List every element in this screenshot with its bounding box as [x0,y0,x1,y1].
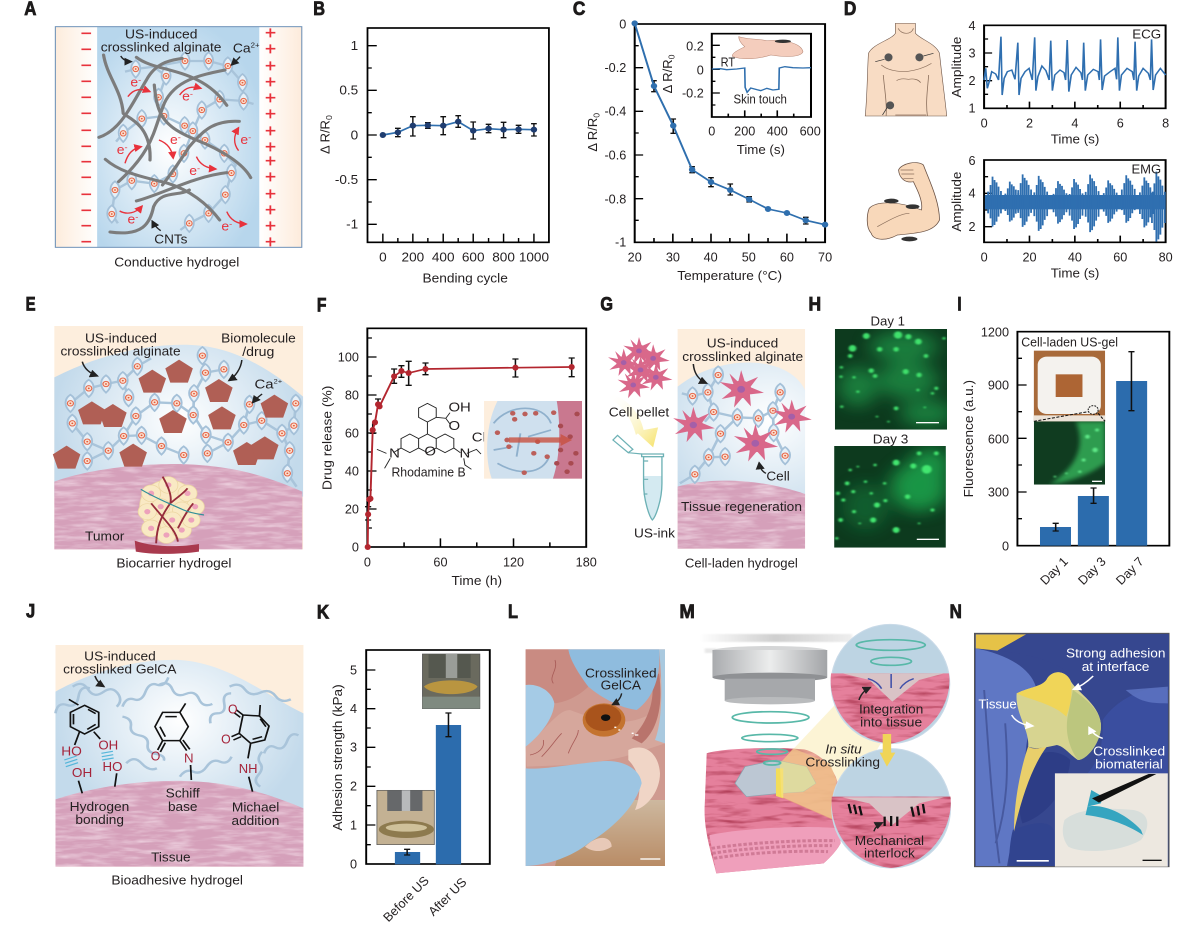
ECG chart: Time (s) [1051,132,1099,147]
annotation arrows A [121,56,240,231]
heading M: M [680,601,695,623]
micrograph: day 3: Day 3 [873,432,909,446]
EMG chart: 40 [1068,251,1082,265]
panel C: temperature chart [573,0,832,284]
axes C: 40 [704,251,718,265]
axes B: Δ R/R [317,120,332,154]
axes C [585,17,832,284]
labels J: Tissue [151,850,191,864]
ECG chart: 2 [969,74,976,88]
inset chart: skin touch: Time (s) [737,143,785,158]
rhodamine B structure: O [448,418,460,433]
panel F: drug release chart [317,295,597,588]
axes K: 2 [350,780,357,794]
zoom circle: integration into tissue: Integration [859,702,923,716]
labels N: at interface [1082,659,1150,674]
electron labels: e [117,142,125,157]
inset photo: blue-stained gel [1055,773,1168,867]
electron labels: e [221,219,229,234]
panel E: biocarrier hydrogel [26,294,303,570]
axes I: Day 7 [1113,555,1147,588]
axes B: 200 [402,250,424,265]
error bars K [404,713,452,855]
labels J: Michael [232,800,279,814]
labels J: base [168,799,198,814]
micrograph: day 1: Day 1 [870,314,905,328]
labels G: Cell pellet [609,405,669,419]
axes C: 70 [818,251,832,265]
annotation arrows E [82,360,262,403]
inset chart: skin touch: 0.2 [686,40,704,54]
labels E: Biomolecule [221,331,296,345]
bars K [395,725,461,864]
label: in situ crosslinking: Crosslinking [805,755,880,769]
labels J: crosslinked GelCA [63,662,177,676]
labels E: /drug [242,344,274,359]
arrow: pellet to tube [609,393,658,447]
EMG chart: 2 [969,220,976,234]
axes F: 40 [345,465,359,479]
ECG chart: ECG [1132,27,1161,42]
axes C: -0.8 [604,192,626,206]
electron labels: e [170,132,178,147]
axes C: 0 [592,113,602,118]
positive electrode [266,28,275,246]
tissue block [705,705,881,873]
axes B: Bending cycle [422,271,508,286]
rhodamine B structure: O [424,444,436,458]
axes K: Before US [381,874,432,925]
rhodamine B structure: Rhodamine B [391,465,466,479]
axes F: 80 [345,389,359,403]
axes F: Time (h) [452,573,502,588]
labels N: biomaterial [1095,757,1163,771]
heading G: G [600,294,613,315]
axes I: 600 [988,432,1009,446]
scale bars N [1017,860,1162,862]
axes F: Drug release (%) [319,386,334,490]
axes B [317,28,549,286]
labels G: Cell [766,469,790,483]
chemical structures: NH [239,761,258,776]
labels E: Biocarrier hydrogel [116,556,232,570]
heading K: K [317,602,329,623]
crosslinked polymer chains [55,677,298,787]
inset chart: skin touch: RT [721,55,735,70]
label L: GelCA [601,677,641,692]
inset chart: skin touch: 400 [767,125,788,139]
embedded cells [673,370,812,461]
labels G: Cell-laden hydrogel [685,556,798,570]
EMG chart: Time (s) [1051,266,1099,281]
arrow: downward yellow [880,734,895,767]
axes C: Δ R/R [585,118,600,152]
labels A: 2+ [251,41,260,49]
EMG chart: 20 [1022,251,1037,265]
axes C: 20 [628,251,642,265]
chemical structures: O [221,732,231,746]
micrograph: day 1 [835,314,954,430]
axes I [961,326,1169,588]
zoom circle: mechanical interlock: interlock [864,846,916,860]
EMG chart: 4 [969,187,976,201]
schematic A frame [55,27,302,247]
axes C: -0.6 [604,148,626,162]
labels N: Tissue [978,697,1017,711]
label L: Crosslinked [585,666,657,681]
chemical structures [61,699,269,793]
ECG chart: 6 [1117,117,1124,131]
EMG chart: 80 [1159,251,1173,265]
micrograph: day 3 [834,432,950,548]
ECG chart: 2 [1026,117,1033,131]
electron labels: e [130,75,138,90]
inset chart: skin touch [660,34,821,158]
rhodamine B structure [377,400,489,479]
axes C: -1 [615,236,626,250]
panel H: fluorescence micrographs [808,294,954,548]
labels A: US-induced [125,27,197,41]
heading J: J [26,601,35,622]
axes F: 180 [576,556,597,570]
EMG chart: EMG [1131,163,1161,177]
electron labels: - [197,163,200,173]
panel I: fluorescence bar chart [957,294,1169,588]
electron labels: - [135,212,138,221]
rhodamine B structure: OH [448,400,471,414]
axes F: 120 [503,556,524,570]
label: in situ crosslinking: In situ [825,742,862,756]
EMG chart [949,154,1173,281]
axes K: 0 [350,857,357,871]
inset chart: skin touch: 0 [708,125,715,139]
annotation arrow L [612,693,622,705]
labels E: Tumor [85,529,125,543]
axes B: 800 [492,250,515,265]
data series B [380,116,537,139]
axes B: 0.5 [339,83,358,98]
labels E: 2+ [274,378,282,385]
panel B: bending cycle chart [313,0,549,286]
axes B: -0.5 [335,172,358,187]
inset chart: skin touch: Skin touch [733,93,787,107]
heading E: E [26,294,36,315]
label: cell-laden US-gel: Cell-laden US-gel [1021,335,1118,349]
rhodamine B structure: Cl [472,430,486,444]
panel N: adhesion photos [950,601,1169,867]
labels E [60,331,296,570]
electron labels: e [189,163,197,178]
axes F: 0 [364,556,371,570]
axes B: 1 [351,38,358,53]
chemical structures: O [228,701,238,716]
EMG chart: 6 [969,154,976,168]
ECG chart: 3 [969,47,976,61]
electron labels: - [178,132,181,142]
axes B: 1000 [519,250,549,265]
axes C: Temperature (°C) [677,269,782,284]
labels E: US-induced [85,331,157,345]
labels N [978,646,1166,771]
electron labels: e [240,132,248,147]
scale bar L [640,858,660,860]
electron labels [117,75,251,234]
EMG chart: Amplitude [949,172,964,232]
ECG chart: 8 [1162,117,1169,131]
labels J: Hydrogen [70,799,129,814]
electron labels: - [125,142,128,152]
photo N [975,633,1169,867]
ECG chart [949,19,1169,147]
axes I: 0 [1002,539,1009,553]
carbon nanotubes [99,55,251,233]
axes F: 60 [345,427,359,441]
chemical structures: HO [61,744,82,758]
chemical structures: N [184,750,194,765]
axes K: 1 [350,818,357,832]
labels A: CNTs [154,232,188,246]
inset micrograph: gel edge [1034,421,1105,485]
axes F: 100 [338,350,359,364]
labels E: Ca [254,377,274,391]
chemical structures: OH [72,765,92,780]
labels A [101,27,260,270]
heading F: F [317,295,326,316]
axes I: Day 3 [1075,555,1109,588]
axes K [330,650,490,925]
labels G: US-induced [707,336,778,350]
inset chart: skin touch: 600 [800,125,821,139]
labels J [63,649,279,887]
labels G [609,336,803,570]
labels G: US-ink [634,526,676,540]
chemical structures: O [151,748,160,763]
axes K: 4 [350,702,357,716]
heading H: H [808,294,821,315]
inset chart: skin touch: 0 [667,54,677,59]
axes B: -1 [346,217,358,232]
labels G: crosslinked alginate [682,349,803,364]
panel A: conductive hydrogel [24,0,302,270]
axes B: 0 [351,128,358,142]
labels N: Crosslinked [1093,744,1165,758]
annotation arrows G [693,364,766,473]
data series C [631,20,828,228]
zoom circle: integration into tissue: into tissue [860,715,922,729]
electron labels: - [248,132,251,142]
labels A: Conductive hydrogel [114,255,239,270]
axes I: Day 1 [1038,555,1071,588]
icon: flexed arm with electrodes [867,163,940,241]
schematic background J [55,645,303,867]
panel J: bioadhesive hydrogel [26,601,303,887]
electron labels: - [138,75,141,85]
label L [585,666,657,692]
ECG chart: 0 [981,117,988,131]
axes B: 600 [462,250,485,265]
annotation arrow J [95,676,104,687]
photo L [526,649,665,866]
inset: drug diffusion into tissue [484,401,582,479]
heading N: N [950,601,962,623]
electron flow arrows [120,87,246,224]
labels J: Bioadhesive hydrogel [111,873,243,887]
axes B: 0 [324,115,334,120]
rhodamine B structure: − [486,435,489,441]
labels G: Tissue regeneration [681,499,802,514]
schematic background G [678,329,805,549]
chemical structures: HO [103,759,123,774]
axes K: After US [426,875,469,919]
data series F [365,358,575,550]
axes K: Adhesion strength (kPa) [330,684,345,831]
annotation arrows N [1012,676,1103,738]
electron labels: - [190,89,193,99]
inset photo: gel frame [1034,351,1105,421]
ECG chart: Amplitude [949,37,964,98]
ultrasound transducer [699,634,852,704]
rhodamine B structure: N [389,445,400,460]
inset photo: before US [377,790,434,845]
axes F: 20 [345,503,359,517]
electron labels: - [229,219,232,229]
ECG chart: 4 [969,19,976,33]
electron labels: e [127,212,135,226]
axes C: -0.2 [604,61,626,75]
inset chart: skin touch: -0.2 [682,87,704,101]
axes B: 400 [432,250,455,265]
negative electrode [81,33,91,242]
axes I: Fluorescence (a.u.) [961,380,976,497]
icon: microcentrifuge tube [613,435,663,520]
EMG chart: 0 [981,251,988,265]
inset chart: skin touch: 0 [697,64,704,78]
cell pellet [608,337,672,398]
bars I [1040,381,1147,546]
axes C: -0.4 [604,104,626,118]
labels J: Schiff [166,786,200,800]
axes C: 30 [666,251,680,265]
axes F: 0 [352,540,359,554]
labels A: Ca [233,41,251,56]
ultrasound waves [732,712,809,765]
axes C: 0 [619,17,626,31]
panel M: in situ crosslinking [680,601,951,873]
axes I: 900 [988,378,1009,392]
axes K: 5 [350,663,357,677]
zoom circle: mechanical interlock [832,749,951,868]
axes I: 1200 [981,326,1009,340]
inset chart: skin touch: 200 [734,125,755,139]
labels A: crosslinked alginate [101,40,221,55]
panel D: ECG and EMG [844,0,1173,281]
tumor with blood vessels [135,477,204,554]
drug pentagons [53,360,288,469]
axes K: 3 [350,741,357,755]
inset photo: after US [422,654,480,709]
alginate network G [680,366,790,483]
label: in situ crosslinking [805,742,880,769]
alginate network E [66,347,301,487]
labels E: crosslinked alginate [60,344,181,358]
axes F: 60 [433,556,447,570]
panel G: cell-laden hydrogel [600,294,812,570]
axes C: 60 [780,251,794,265]
rhodamine B structure: N [460,446,470,460]
ECG chart: 4 [1071,117,1078,131]
axes C: 50 [742,251,756,265]
zoom circle: mechanical interlock: Mechanical [855,833,924,848]
panel K: adhesion strength chart [317,602,490,925]
axes I: 300 [988,485,1009,499]
icon: torso with electrodes [865,23,947,116]
labels J: bonding [75,812,124,827]
panel L: in vivo photo [508,602,665,866]
EMG chart: 60 [1113,251,1127,265]
heading I: I [957,294,962,315]
chemical structures: OH [98,737,118,752]
electron labels: e [182,89,190,104]
inset chart: skin touch: Δ R/R [660,59,675,93]
heading L: L [508,602,518,623]
ECG chart: 1 [969,102,976,116]
axes B: 0 [379,250,387,265]
labels J: addition [232,813,279,828]
icon: hand with electrode [732,37,803,59]
zoom circle: integration into tissue [831,624,950,744]
error bars I [1053,352,1135,531]
alginate network [107,52,254,232]
labels J: US-induced [84,649,156,663]
axes F [319,328,597,588]
schematic background E [54,326,303,549]
labels N: Strong adhesion [1066,646,1166,660]
